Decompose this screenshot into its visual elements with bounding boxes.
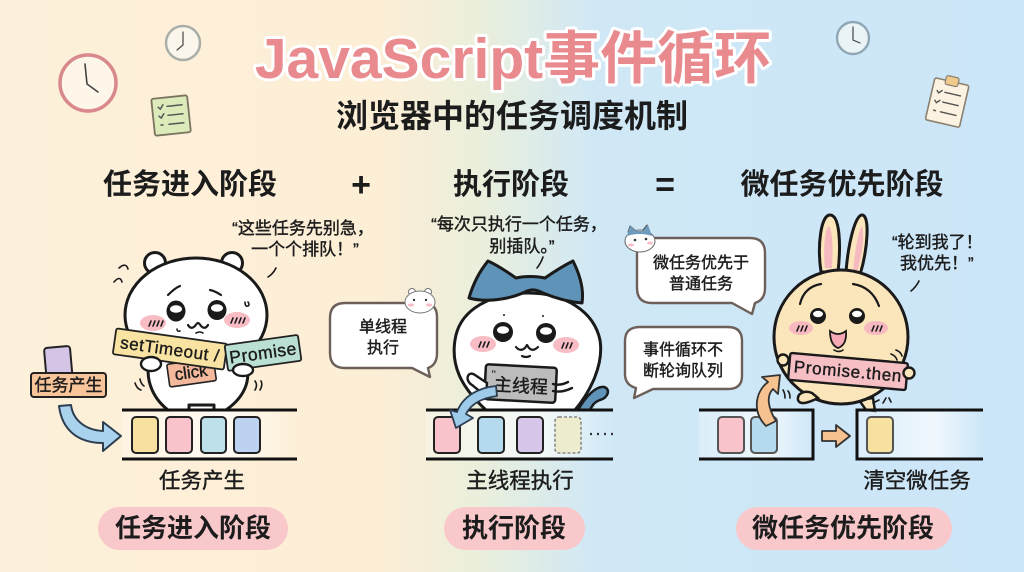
character: white bear — [113, 252, 301, 410]
quote: bear: “这些任务先别急， — [232, 219, 374, 238]
panel: microtask — [625, 215, 985, 550]
character: rabbit — [774, 215, 914, 411]
panel: task entry — [31, 219, 374, 550]
icon: green checklist — [151, 95, 191, 136]
tablet: main thread: " — [491, 368, 496, 382]
icon: blue clock — [837, 22, 869, 54]
tablet: main thread: 主线程 — [493, 375, 548, 397]
plus sign: + — [351, 166, 371, 204]
subtitle: 浏览器中的任务调度机制 — [336, 98, 688, 134]
panel: execution — [330, 215, 616, 550]
quote: cat: 别插队。” — [489, 237, 555, 256]
pill: execution phase: 执行阶段 — [462, 513, 566, 543]
bubble: microtask first: 微任务优先于 — [653, 254, 749, 272]
arrow: to first card — [450, 386, 497, 428]
label: task created: 任务产生 — [34, 376, 102, 395]
bubble: event loop polls: 断轮询队列 — [643, 362, 723, 380]
bubble: single thread — [330, 288, 437, 377]
icon: large pink clock — [60, 55, 116, 111]
equals sign: = — [655, 166, 675, 204]
sticker: click — [167, 358, 216, 387]
queue caption: 任务产生 — [159, 469, 245, 493]
queue: microtask right — [857, 410, 985, 459]
sticker: Promise: Promise — [228, 338, 298, 367]
quote: bear: 一个个排队！” — [251, 240, 359, 259]
bubble: event loop polls — [625, 327, 742, 398]
pill: microtask phase: 微任务优先阶段 — [752, 513, 934, 543]
queue caption: 清空微任务 — [863, 469, 971, 493]
quote: cat — [431, 215, 607, 268]
heading: task entry phase: 任务进入阶段 — [103, 168, 277, 201]
bubble: event loop polls: 事件循环不 — [643, 341, 723, 359]
bubble: microtask first: 普通任务 — [669, 275, 733, 293]
bubble: single thread: 单线程 — [359, 318, 407, 336]
heading: microtask priority phase: 微任务优先阶段 — [740, 168, 944, 201]
pill: execution phase — [444, 507, 585, 550]
sticker: click: click — [173, 361, 209, 384]
bubble: microtask first — [625, 225, 765, 314]
sign: Promise.then — [788, 353, 908, 390]
icon: new purple task card — [44, 346, 72, 378]
heading: execution phase: 执行阶段 — [453, 168, 569, 201]
arrow: between queues — [822, 425, 850, 447]
arrow: into queue — [59, 405, 121, 451]
icon: clipboard — [925, 73, 970, 127]
bubble: single thread: 执行 — [367, 339, 399, 357]
icon: small grey clock — [166, 26, 200, 60]
icon: mini cat — [625, 225, 655, 252]
pill: task entry phase: 任务进入阶段 — [115, 513, 271, 543]
sign: Promise.then: Promise.then — [793, 357, 903, 386]
queue: task queue — [122, 410, 300, 459]
quote: cat: “每次只执行一个任务， — [431, 215, 607, 234]
queue: microtask left — [699, 410, 813, 459]
queue caption: 主线程执行 — [466, 469, 574, 493]
quote: rabbit — [892, 233, 983, 291]
quote: rabbit: 我优先！” — [900, 254, 974, 273]
arrow: up to rabbit — [757, 375, 780, 426]
queue: main thread — [426, 410, 616, 459]
title: JavaScript事件循环 — [255, 27, 771, 91]
tablet: main thread — [484, 364, 557, 403]
sticker: setTimeout: setTimeout / — [119, 333, 221, 366]
pill: microtask phase — [736, 507, 952, 550]
character: cat — [454, 261, 608, 410]
pill: task entry phase — [98, 507, 288, 550]
quote: bear — [232, 219, 374, 277]
icon: mini bear — [405, 288, 435, 313]
quote: rabbit: “轮到我了！ — [892, 233, 983, 252]
